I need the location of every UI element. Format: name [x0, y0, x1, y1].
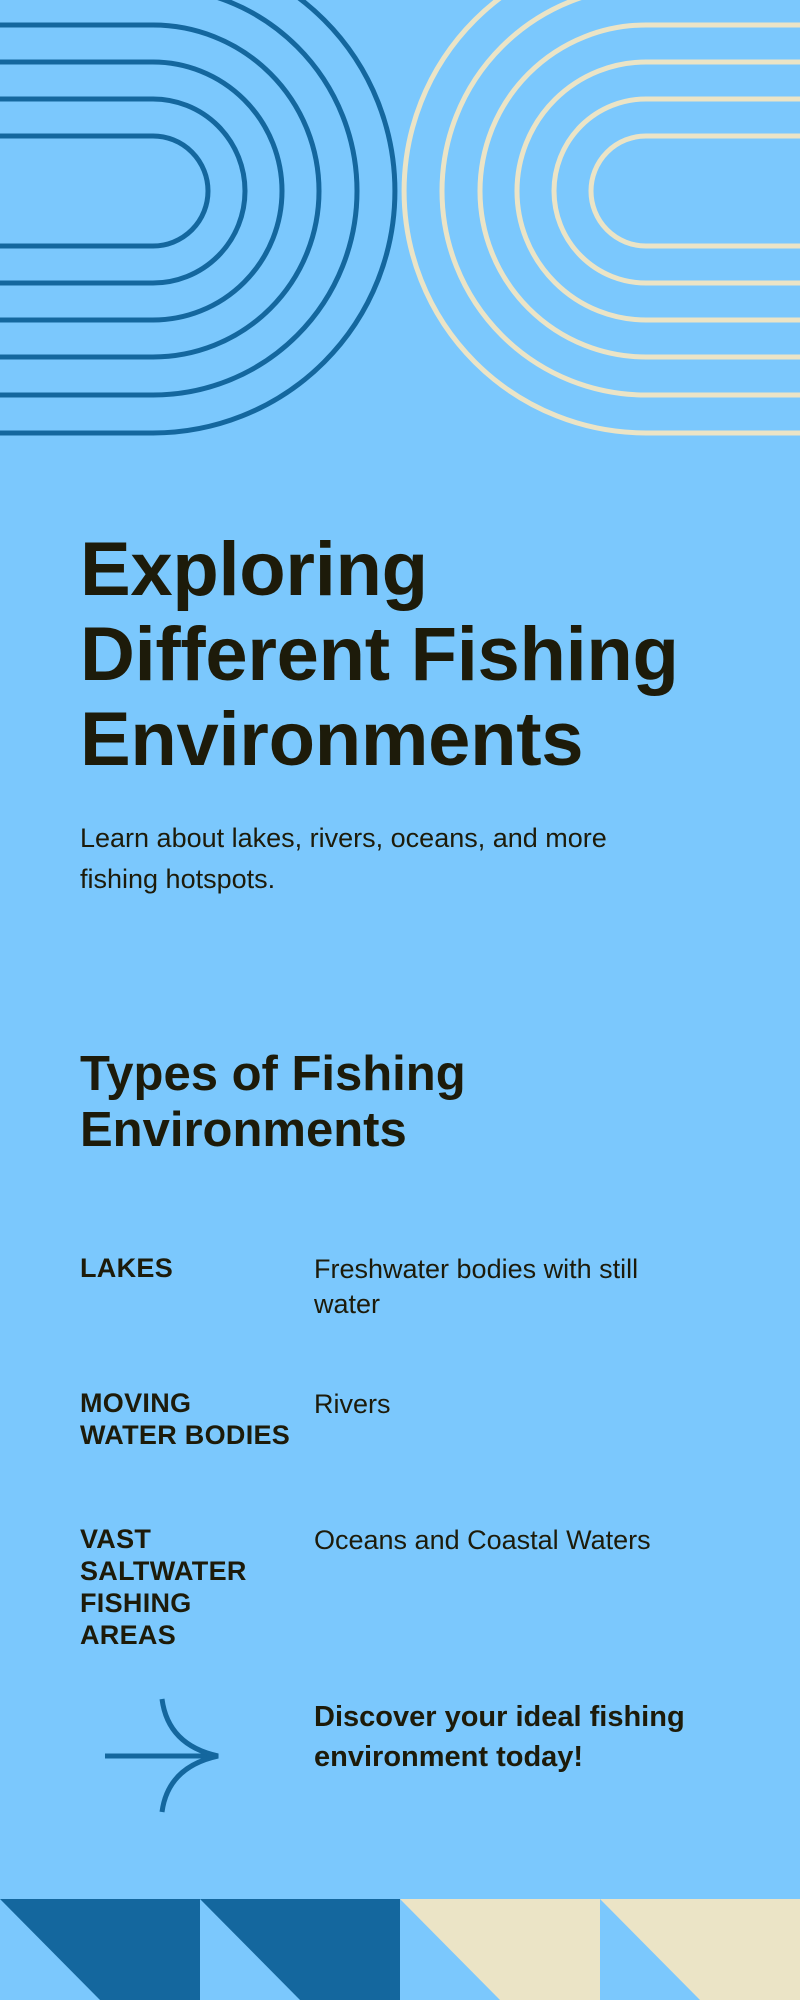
subtitle: fishing hotspots.	[80, 864, 275, 894]
icon: arrow	[105, 1698, 219, 1812]
title: Different Fishing	[80, 612, 679, 697]
label: vast saltwater fishing areas: FISHING	[80, 1588, 192, 1618]
description: lakes: Freshwater bodies with still	[314, 1254, 638, 1284]
section heading: Environments	[80, 1103, 407, 1157]
description: lakes	[314, 1254, 638, 1319]
row: oceans	[80, 1524, 651, 1650]
description: oceans: Oceans and Coastal Waters	[314, 1525, 651, 1555]
title: Exploring	[80, 527, 428, 612]
label: moving water bodies	[80, 1388, 290, 1450]
label: lakes: LAKES	[80, 1253, 173, 1283]
label: vast saltwater fishing areas: SALTWATER	[80, 1556, 247, 1586]
description: rivers: Rivers	[314, 1389, 391, 1419]
label: moving water bodies: WATER BODIES	[80, 1420, 290, 1450]
label: moving water bodies: MOVING	[80, 1388, 191, 1418]
title	[80, 527, 679, 782]
decorative arcs: top	[0, 0, 800, 436]
label: vast saltwater fishing areas	[80, 1524, 247, 1650]
subtitle	[80, 823, 607, 894]
label: vast saltwater fishing areas: VAST	[80, 1524, 151, 1554]
call to action: Discover your ideal fishing	[314, 1701, 685, 1733]
title: Environments	[80, 697, 583, 782]
section heading: Types of Fishing	[80, 1047, 466, 1101]
bottom triangle band	[0, 1899, 800, 2000]
label: vast saltwater fishing areas: AREAS	[80, 1620, 176, 1650]
row: lakes	[80, 1253, 638, 1319]
description: lakes: water	[314, 1289, 380, 1319]
subtitle: Learn about lakes, rivers, oceans, and more	[80, 823, 607, 853]
call to action: environment today!	[314, 1741, 583, 1773]
row: rivers	[80, 1388, 391, 1450]
call to action	[314, 1701, 685, 1773]
section heading	[80, 1047, 466, 1157]
